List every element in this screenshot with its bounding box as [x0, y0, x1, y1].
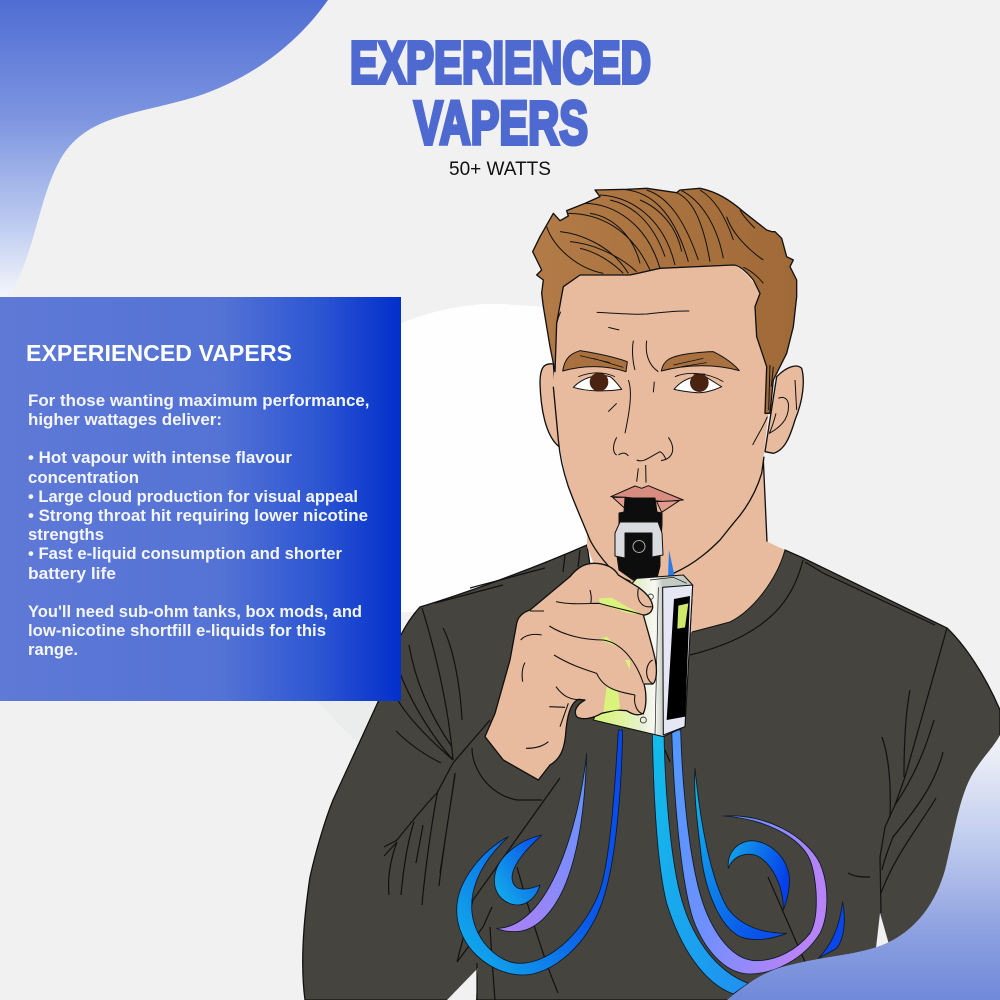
- panel body text: • Strong throat hit requiring lower nicotine: [28, 507, 368, 525]
- panel body text: battery life: [28, 565, 116, 583]
- info panel: [0, 297, 401, 701]
- main title: VAPERS: [414, 89, 588, 158]
- bottom-right blue wave: [727, 735, 1000, 1000]
- collar edge: [692, 550, 785, 632]
- white cloud shape behind figure: [395, 304, 600, 612]
- mod screen: [667, 596, 690, 720]
- jaw and neck outline: [553, 387, 767, 582]
- neck: [587, 460, 785, 647]
- panel body text: range.: [28, 641, 78, 659]
- gap at right arm: [876, 913, 890, 948]
- panel body text: For those wanting maximum performance,: [28, 392, 370, 410]
- panel heading: EXPERIENCED VAPERS: [26, 340, 292, 366]
- gap between arm and body: [447, 968, 478, 1000]
- brow detail: [580, 356, 707, 367]
- vape spike above mod: [668, 550, 675, 578]
- shirt fold lines: [384, 550, 947, 1000]
- left eyebrow: [563, 351, 627, 372]
- right eye: [674, 376, 722, 393]
- green mod glimpses between fingers: [598, 598, 643, 712]
- hand holding device: [485, 563, 656, 780]
- panel body text: strengths: [28, 526, 104, 544]
- panel body text: low-nicotine shortfill e-liquids for this: [28, 622, 326, 640]
- panel body text: • Hot vapour with intense flavour: [28, 449, 293, 467]
- lips: [611, 486, 683, 502]
- hair: [533, 188, 797, 413]
- main title: [350, 30, 651, 158]
- left eye: [573, 375, 622, 391]
- man illustration: [303, 188, 1000, 1000]
- faint shadow below panel: [317, 701, 378, 743]
- panel body text: • Large cloud production for visual appeal: [28, 488, 358, 506]
- panel body text: You'll need sub-ohm tanks, box mods, and: [28, 603, 362, 621]
- mod window: [677, 603, 688, 629]
- vape mod: [593, 575, 693, 737]
- panel body text: • Fast e-liquid consumption and shorter: [28, 545, 343, 563]
- finger lines: [521, 590, 643, 748]
- face: [553, 265, 768, 540]
- vape tank: [615, 498, 663, 580]
- top-left blue wave: [0, 0, 328, 297]
- hair strands: [547, 189, 773, 410]
- panel background: [0, 297, 401, 701]
- left ear: [540, 364, 560, 447]
- shirt: [303, 545, 1000, 1000]
- mod front panel: [663, 585, 693, 735]
- forehead and nose lines: [597, 311, 797, 483]
- main title: EXPERIENCED: [350, 30, 651, 96]
- panel body text: [28, 392, 370, 659]
- subtitle: 50+ WATTS: [449, 158, 551, 180]
- mod body: [593, 575, 693, 737]
- right ear: [765, 366, 803, 453]
- panel body text: concentration: [28, 469, 139, 487]
- ears, neck and head: [533, 188, 803, 647]
- eyelid lines: [578, 373, 723, 382]
- right eyebrow: [661, 352, 739, 371]
- vapour swirls: [457, 730, 844, 994]
- fingernails: [635, 588, 653, 714]
- panel body text: higher wattages deliver:: [28, 411, 222, 429]
